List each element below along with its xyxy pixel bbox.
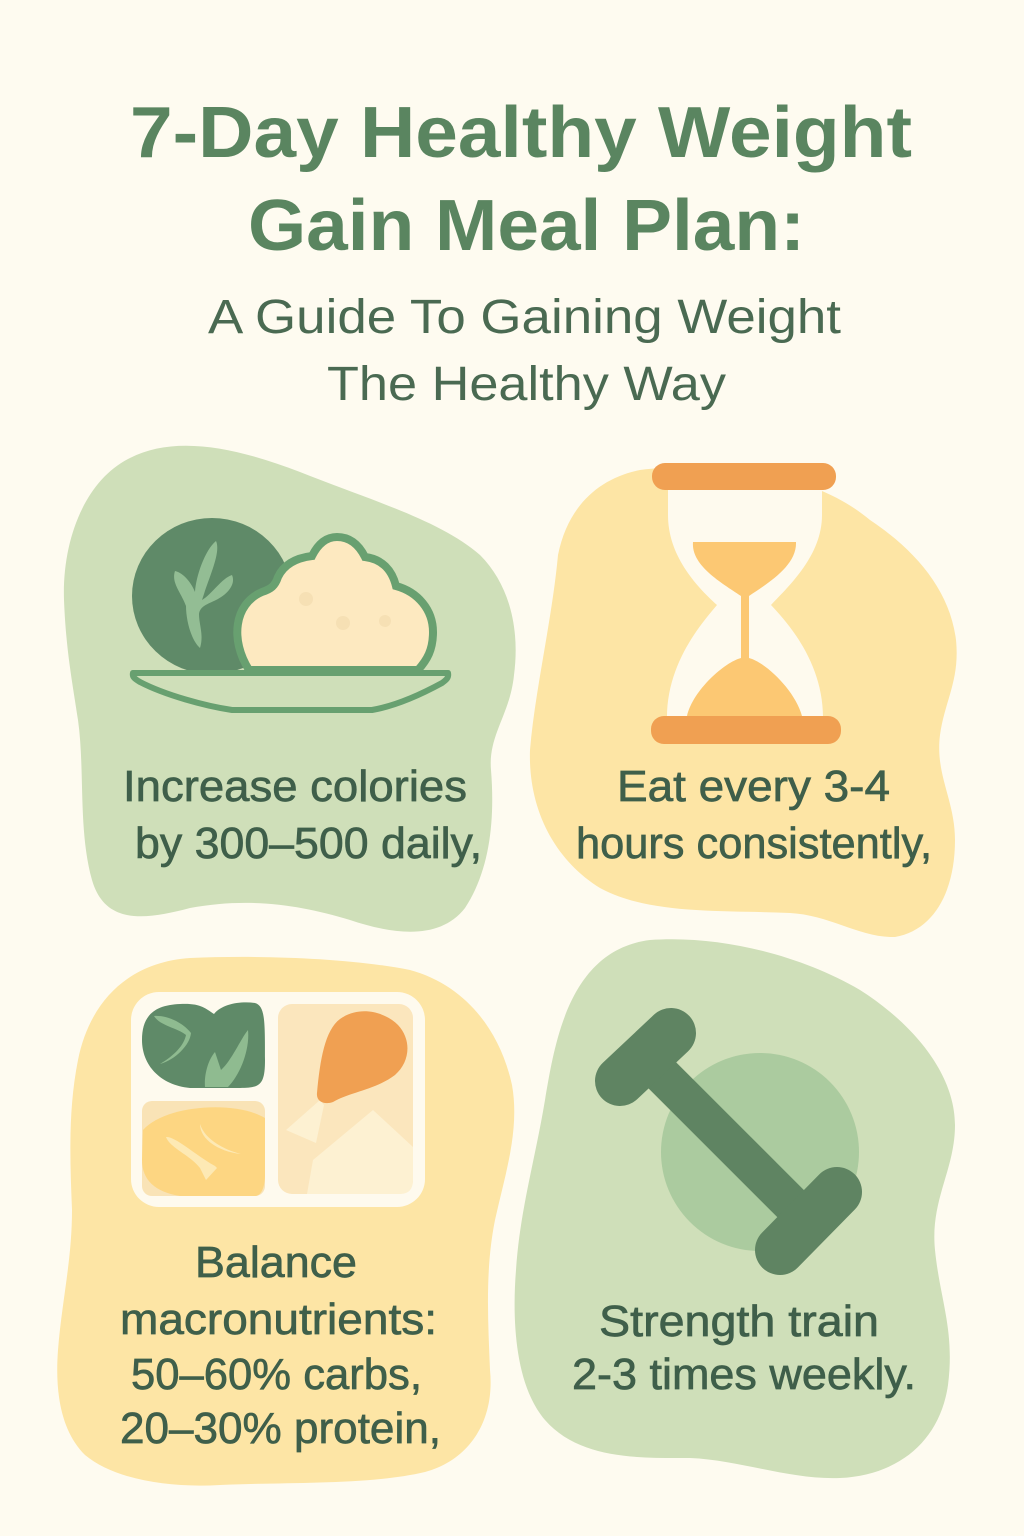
text: strength training bbox=[572, 1297, 916, 1399]
title bbox=[130, 93, 912, 266]
subtitle: A Guide To Gaining Weight bbox=[208, 291, 841, 344]
green blob background bbox=[515, 939, 955, 1478]
text: macronutrients bbox=[120, 1238, 441, 1453]
text: macronutrients: Balance bbox=[195, 1238, 357, 1287]
text: meal timing bbox=[576, 762, 932, 868]
text: strength training: Strength train bbox=[599, 1297, 879, 1346]
text: calories bbox=[123, 762, 482, 868]
text: strength training: 2-3 times weekly. bbox=[572, 1350, 916, 1399]
icon: greens and mash on a plate bbox=[132, 518, 448, 710]
text: calories: Increase colories bbox=[123, 762, 467, 811]
panel: macronutrients bbox=[57, 957, 514, 1486]
icon: dumbbell bbox=[620, 1033, 859, 1251]
title: 7-Day Healthy Weight bbox=[130, 93, 912, 173]
panel: strength training bbox=[515, 939, 955, 1478]
green blob background bbox=[64, 446, 516, 932]
panel: calories bbox=[64, 446, 516, 932]
yellow blob background bbox=[530, 467, 957, 937]
icon: hourglass bbox=[651, 463, 841, 744]
panel: meal timing bbox=[530, 463, 957, 937]
icon: meal tray bbox=[131, 992, 425, 1207]
text: meal timing: Eat every 3-4 bbox=[617, 762, 890, 811]
yellow blob background bbox=[57, 957, 514, 1486]
title: Gain Meal Plan: bbox=[248, 186, 805, 266]
subtitle: The Healthy Way bbox=[327, 358, 726, 411]
text: macronutrients: macronutrients: bbox=[120, 1295, 437, 1344]
text: meal timing: hours consistently, bbox=[576, 819, 932, 868]
text: calories: by 300–500 daily, bbox=[135, 819, 482, 868]
text: macronutrients: 50–60% carbs, bbox=[131, 1350, 422, 1399]
text: macronutrients: 20–30% protein, bbox=[120, 1404, 441, 1453]
subtitle bbox=[208, 291, 841, 411]
